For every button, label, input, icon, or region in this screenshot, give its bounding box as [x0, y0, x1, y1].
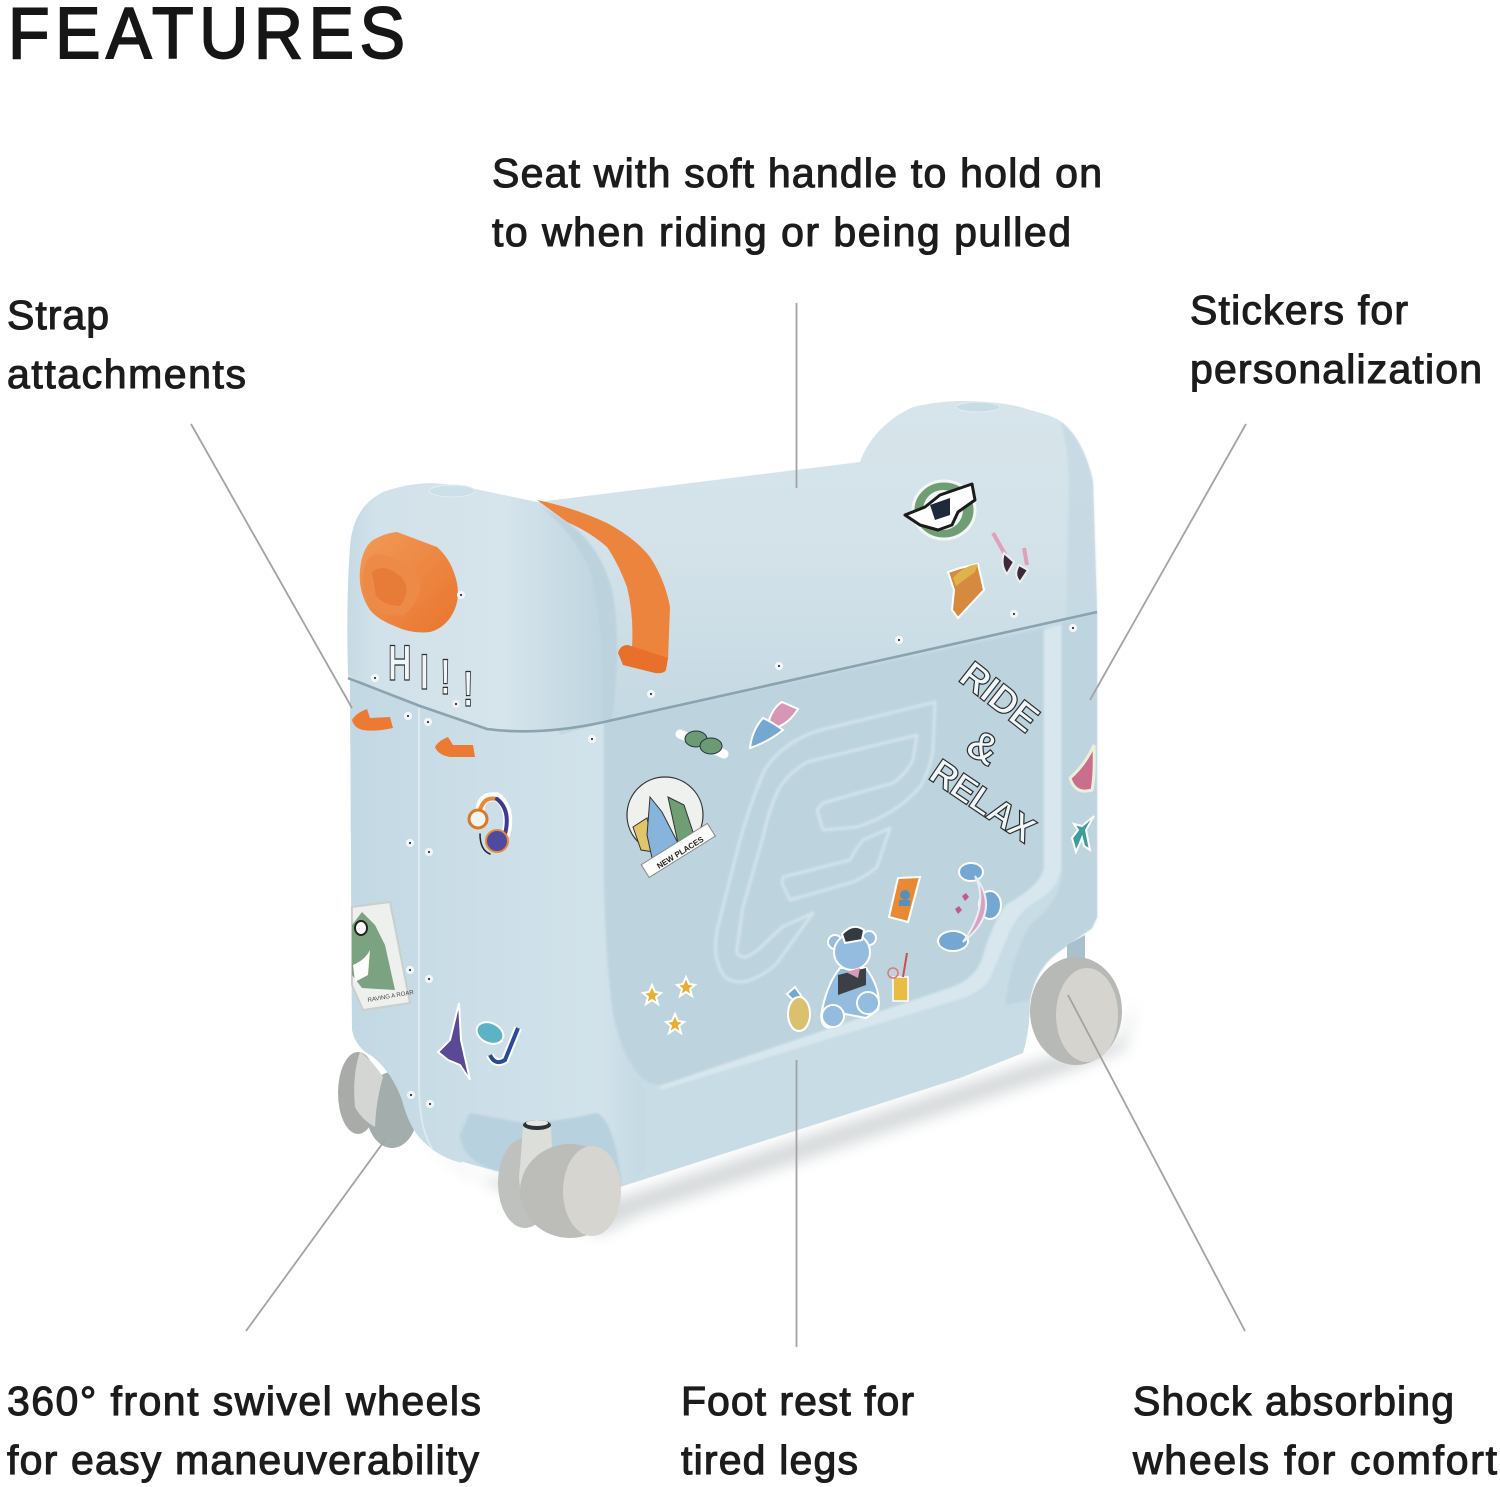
callout: front swivel wheels	[7, 1378, 481, 1483]
sticker: headphones	[469, 797, 508, 854]
sticker: sleep mask	[680, 731, 724, 754]
sticker: plane badge	[905, 481, 975, 539]
sticker: HI!!: HI!!	[388, 635, 474, 717]
sticker: airplane	[1072, 816, 1094, 852]
leader line: swivel wheels	[246, 1140, 385, 1331]
sticker: dinosaur	[352, 902, 415, 1010]
leader line: shock wheels	[1068, 995, 1245, 1331]
front lid	[347, 483, 604, 734]
callout: strap attachments: attachments	[7, 351, 246, 397]
suitcase illustration	[338, 401, 1135, 1238]
leader line: strap attachments	[191, 424, 352, 708]
front swivel wheel	[498, 1120, 621, 1238]
sticker: pineapple	[787, 987, 810, 1031]
embossed logo	[716, 702, 935, 982]
callout: shock absorbing wheels: Shock absorbing	[1133, 1378, 1454, 1424]
sticker: stars	[643, 977, 695, 1033]
sticker: backpack	[948, 564, 984, 618]
rear left wheel	[338, 1052, 418, 1148]
sticker: drink	[888, 953, 908, 1001]
sticker: RIDE & RELAX: RELAX	[923, 751, 1043, 851]
callout: foot rest: tired legs	[681, 1437, 858, 1483]
strap attachment loops	[352, 709, 475, 757]
leader line: seat handle	[796, 303, 798, 488]
seat top	[530, 401, 1097, 735]
ground shadow	[420, 1000, 1135, 1235]
callout: foot rest	[681, 1378, 914, 1483]
lid shade by strap	[540, 505, 617, 720]
sticker: snorkel	[473, 1018, 518, 1062]
rear right wheel	[1030, 935, 1122, 1065]
sticker: RIDE & RELAX	[923, 654, 1047, 851]
front panel seam	[419, 708, 432, 1148]
wheel arch shade	[460, 1113, 622, 1186]
callout: shock absorbing wheels	[1132, 1378, 1498, 1483]
sticker: cloud	[750, 702, 798, 748]
callout: stickers	[1190, 287, 1482, 392]
sticker: new places	[627, 777, 715, 877]
sticker: dinosaur: RAVING A ROAR	[367, 990, 415, 1004]
top buttons	[429, 402, 1000, 497]
callout: strap attachments: Strap	[7, 292, 109, 338]
callout: stickers: personalization	[1190, 346, 1482, 392]
sticker: sunglasses	[993, 533, 1028, 582]
callout: shock absorbing wheels: wheels for comfort	[1132, 1437, 1498, 1483]
front face	[350, 680, 645, 1187]
rivets	[372, 592, 1076, 1107]
side panel recess	[604, 628, 1044, 1085]
sticker: bear	[821, 927, 879, 1028]
callout: front swivel wheels: for easy maneuverability	[7, 1437, 480, 1483]
leader line: foot rest	[796, 1060, 798, 1347]
sticker: new places: NEW PLACES	[655, 834, 706, 871]
callout: seat with soft handle	[492, 150, 1102, 255]
right strip	[1005, 612, 1097, 1005]
hump side shade	[1060, 421, 1097, 621]
leader line: stickers	[1090, 424, 1246, 700]
callout: stickers: Stickers for	[1190, 287, 1408, 333]
sticker: RIDE & RELAX: RIDE	[951, 654, 1047, 741]
sticker: watermelon	[1070, 745, 1094, 791]
sticker: RIDE & RELAX: &	[958, 719, 1008, 775]
sticker: moon	[938, 863, 1001, 951]
lid seam line	[348, 612, 1097, 731]
callout: seat with soft handle: Seat with soft handle to hold on	[492, 150, 1102, 196]
suitcase body	[350, 612, 1097, 1187]
callout: strap attachments	[7, 292, 246, 397]
orange strap	[537, 500, 670, 673]
side panel rim	[660, 625, 1061, 1090]
sticker: eiffel tower	[438, 1003, 470, 1080]
callout: seat with soft handle: to when riding or being pulled	[492, 209, 1071, 255]
sticker: passport	[889, 877, 920, 922]
callout: foot rest: Foot rest for	[681, 1378, 914, 1424]
callout: front swivel wheels: 360° front swivel wheels	[7, 1378, 481, 1424]
orange front handle	[360, 532, 458, 632]
